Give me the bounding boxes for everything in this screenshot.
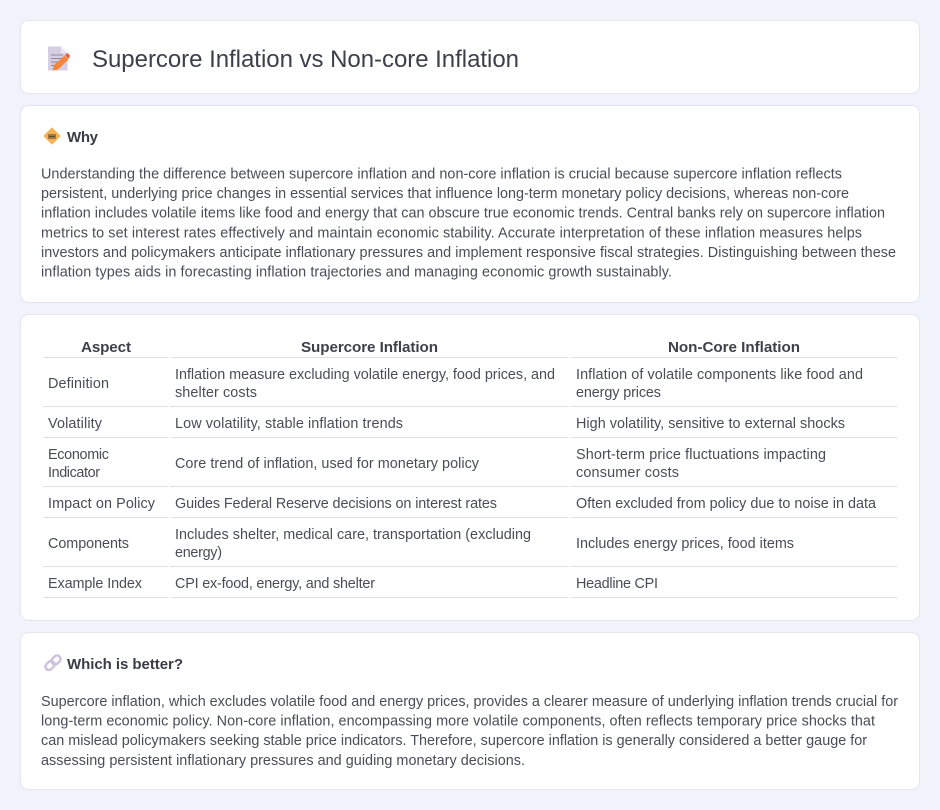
icon: memo with pencil	[48, 46, 70, 70]
heading: which is better: Which is better?	[67, 656, 183, 673]
table row: economic indicator: consumer costs	[576, 465, 679, 481]
heading: why: Why	[67, 129, 99, 146]
table row: economic indicator: Short-term price fluctuations impacting	[576, 447, 826, 463]
table row: definition: Inflation of volatile components like food and	[576, 367, 863, 383]
table row: components: energy)	[175, 545, 222, 561]
table row: components: Includes energy prices, food items	[576, 536, 794, 552]
table row: definition	[43, 367, 897, 407]
panel: why	[20, 106, 920, 302]
table row: impact on policy: Impact on Policy	[48, 496, 156, 512]
text block: why paragraph: Understanding the difference between supercore inflation and non-core inflation is crucial because supercore inflation reflects	[41, 166, 842, 182]
text block: why paragraph: persistent, underlying price changes in essential services that influence long-term monetary policy decisions, whereas non-core	[41, 186, 849, 202]
table row: components	[43, 527, 897, 567]
table row: example index: CPI ex-food, energy, and shelter	[175, 576, 375, 592]
table row: impact on policy: Often excluded from policy due to noise in data	[576, 496, 876, 512]
table row: economic indicator: Indicator	[48, 465, 100, 481]
table row: economic indicator	[43, 447, 897, 487]
table row: components: Includes shelter, medical care, transportation (excluding	[175, 527, 531, 543]
table row: definition: Inflation measure excluding volatile energy, food prices, and	[175, 367, 555, 383]
table row: impact on policy	[43, 496, 897, 518]
table header row	[43, 339, 897, 358]
text block: which is better paragraph: Supercore inflation, which excludes volatile food and energy prices, provides a clearer measure of underlying inflation trends crucial for	[41, 694, 898, 710]
table row: volatility	[43, 416, 897, 438]
table row: economic indicator: Economic	[48, 447, 109, 463]
panel: title header	[20, 20, 920, 94]
table header row: Non-Core Inflation	[668, 339, 800, 356]
table header row: Aspect	[81, 339, 131, 356]
table row: volatility: High volatility, sensitive to external shocks	[576, 416, 845, 432]
table row: example index: Example Index	[48, 576, 143, 592]
text block: why paragraph	[41, 166, 896, 280]
table row: definition: energy prices	[576, 385, 661, 401]
text block: why paragraph: metrics to set interest rates effectively and maintain economic stability. Accurate interpretation of these inflation measures helps	[41, 225, 862, 241]
text block: why paragraph: inflation types aids in forecasting inflation trajectories and managing economic growth sustainably.	[41, 264, 672, 280]
icon: orange diamond sign	[44, 128, 60, 144]
table row: example index	[43, 576, 897, 598]
text block: which is better paragraph: can mislead policymakers seeking stable price indicators. Therefore, supercore inflation is generally considered a better gauge for	[41, 733, 867, 749]
text block: which is better paragraph: long-term economic policy. Non-core inflation, encompassing more volatile components, often reflects temporary price shocks that	[41, 714, 875, 730]
table row: economic indicator: Core trend of inflation, used for monetary policy	[175, 456, 480, 472]
title: Supercore Inflation vs Non-core Inflation	[92, 46, 519, 73]
text block: which is better paragraph: assessing persistent inflationary pressures and guiding monetary decisions.	[41, 753, 525, 769]
table row: definition: shelter costs	[175, 385, 257, 401]
text block: why paragraph: investors and policymakers anticipate inflationary pressures and implement responsive fiscal strategies. Distinguishing between these	[41, 245, 896, 261]
table row: definition: Definition	[48, 376, 109, 392]
text block: which is better paragraph	[41, 694, 898, 769]
table row: volatility: Low volatility, stable inflation trends	[175, 416, 403, 432]
table row: components: Components	[48, 536, 129, 552]
panel: which is better	[20, 632, 920, 790]
table row: volatility: Volatility	[48, 416, 103, 432]
panel: comparison table	[20, 314, 920, 620]
icon: chain link	[44, 654, 62, 672]
table row: impact on policy: Guides Federal Reserve decisions on interest rates	[175, 496, 497, 512]
text block: why paragraph: inflation includes volatile items like food and energy that can obscure true economic trends. Central banks rely on supercore inflation	[41, 206, 885, 222]
table row: example index: Headline CPI	[576, 576, 658, 592]
table header row: Supercore Inflation	[301, 339, 438, 356]
